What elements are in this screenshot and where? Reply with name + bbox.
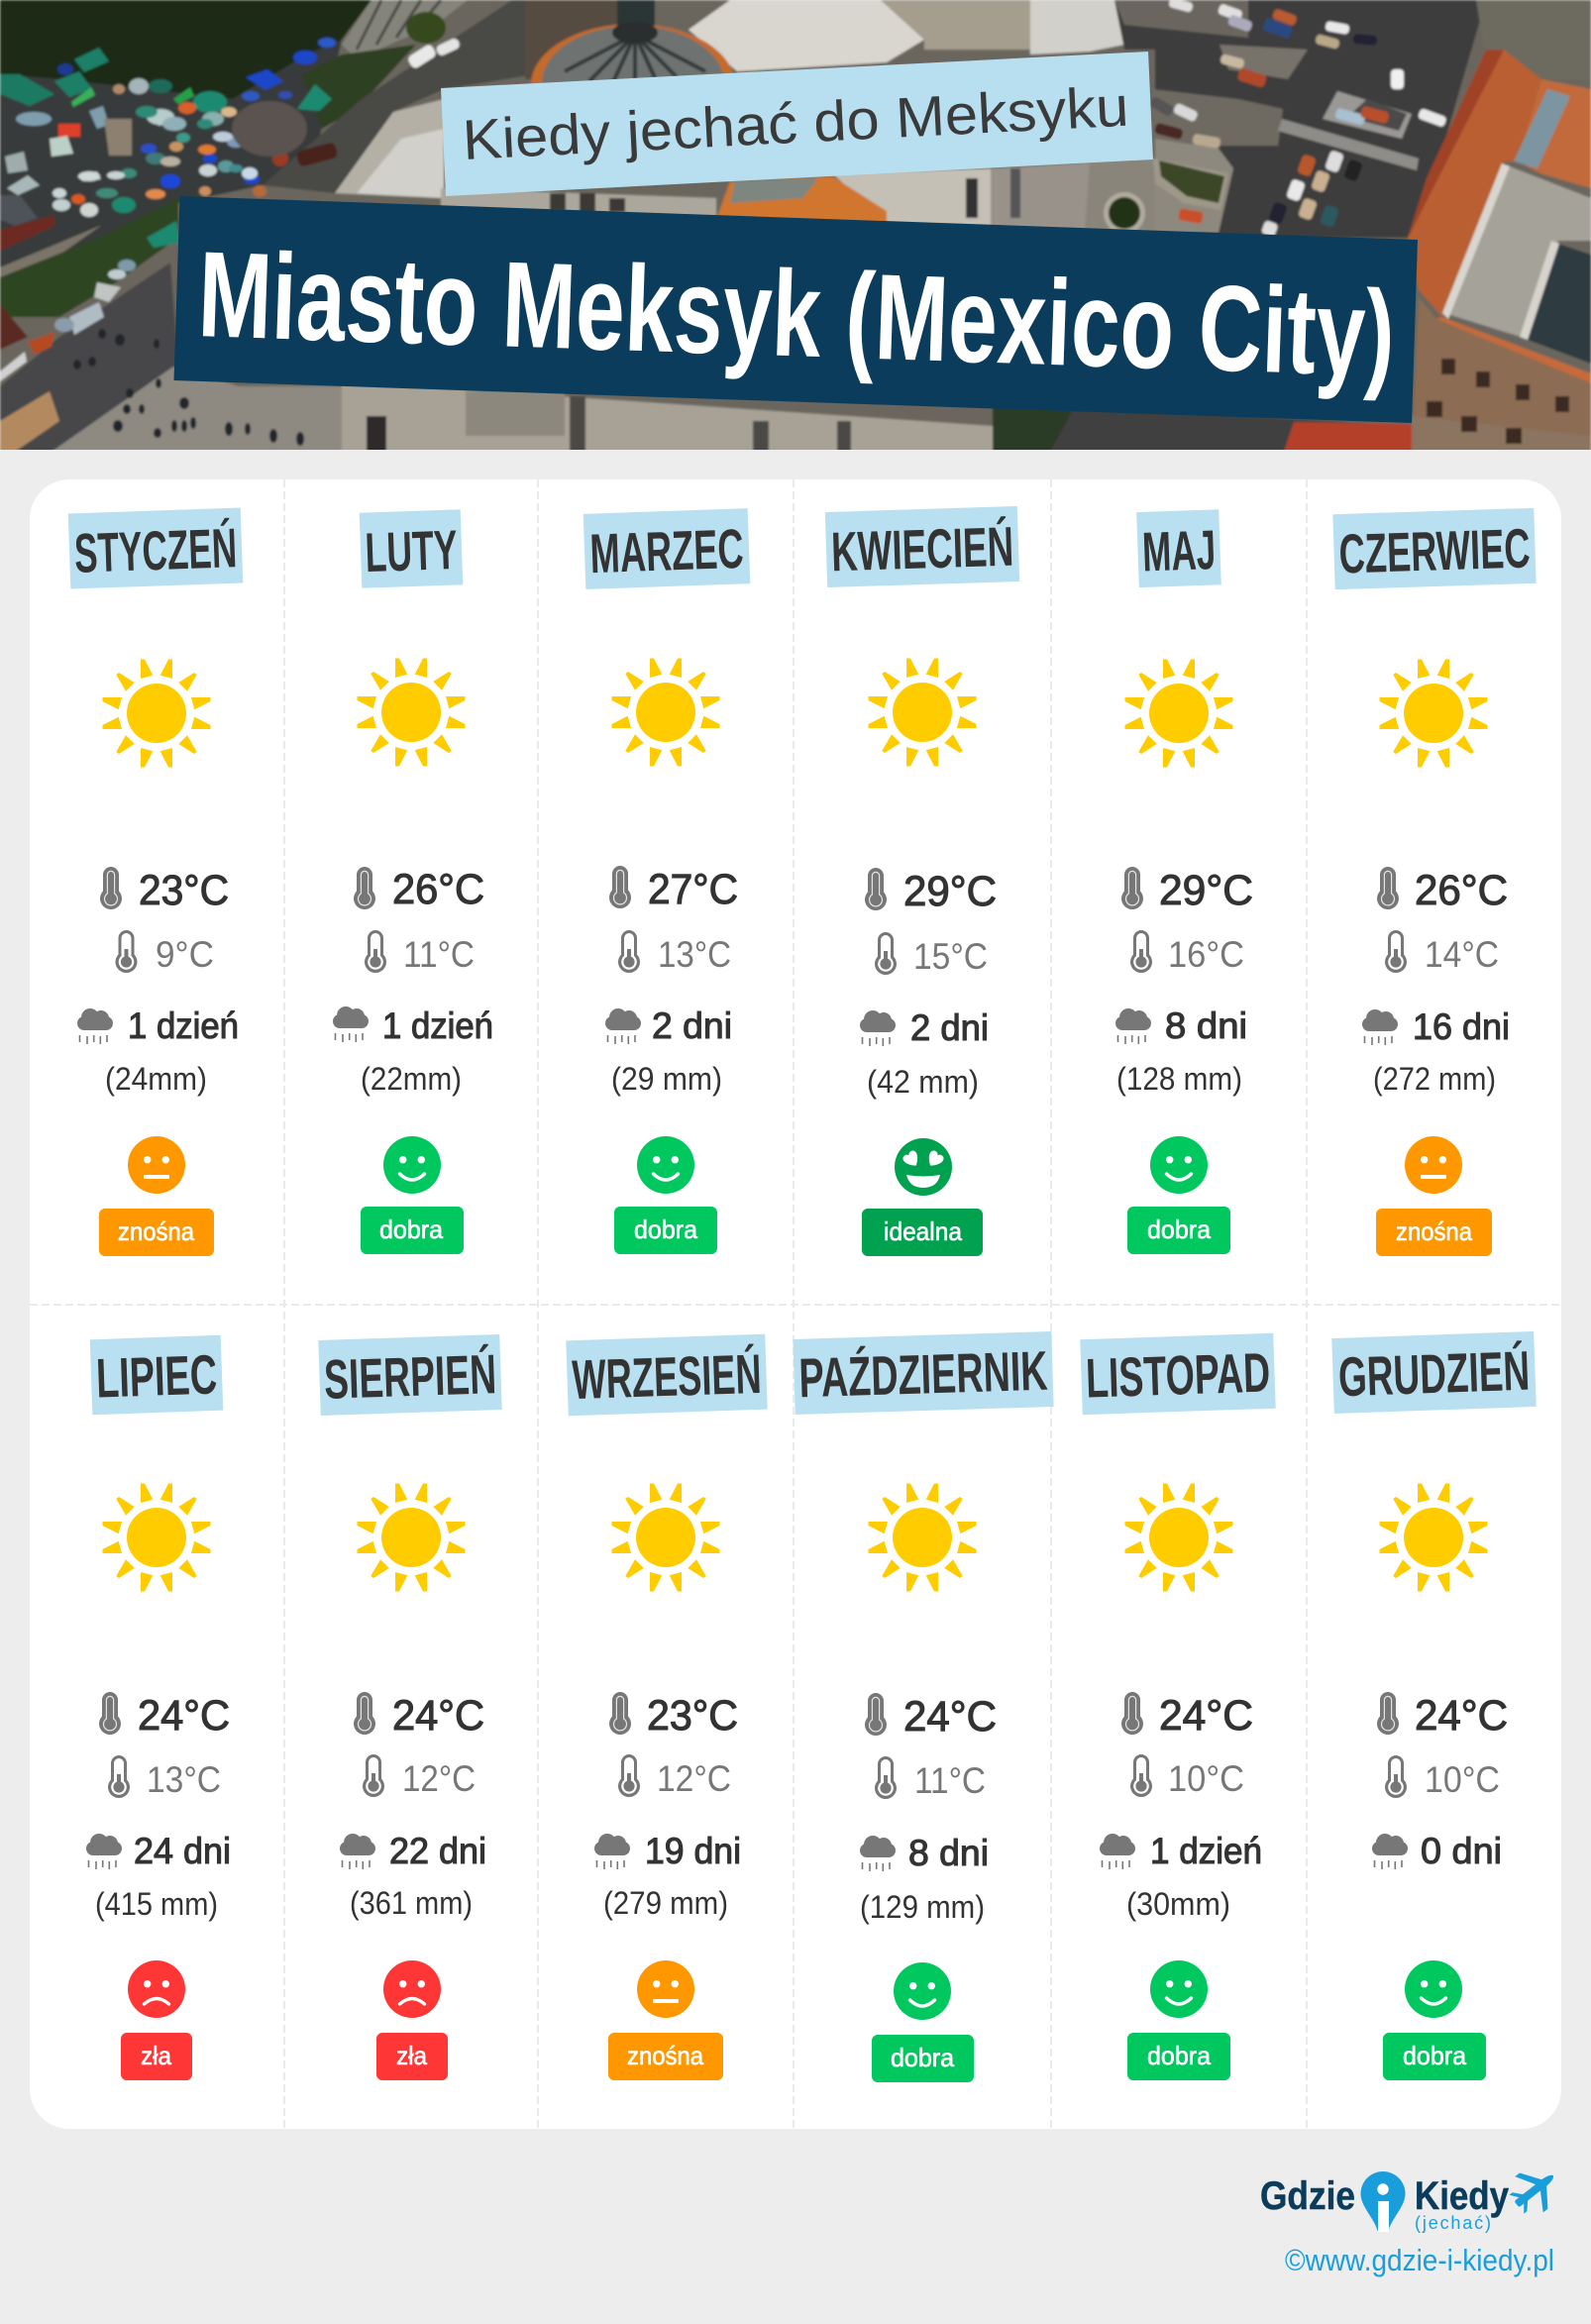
min temperature: 13°C <box>658 934 731 975</box>
icon: airplane <box>1503 2158 1567 2222</box>
heading: grudzień <box>1331 1331 1537 1414</box>
heading: sierpień: SIERPIEŃ <box>323 1342 497 1411</box>
rainfall: (22mm) <box>361 1061 462 1097</box>
logo: Gdzie i Kiedy: Kiedy <box>1415 2174 1510 2218</box>
min temperature: 11°C <box>403 934 475 975</box>
heading: styczeń: STYCZEŃ <box>73 516 238 584</box>
icon: sun <box>1379 1484 1488 1591</box>
rainfall: (415 mm) <box>95 1886 218 1922</box>
rating badge <box>361 1207 464 1254</box>
rating badge <box>614 1207 717 1254</box>
rating badge <box>1383 2033 1486 2080</box>
market tents <box>0 37 461 452</box>
heading: październik <box>793 1331 1054 1415</box>
min temperature: 16°C <box>1168 934 1244 975</box>
heading: maj <box>1136 509 1221 587</box>
icon: neutral face <box>637 1960 694 2018</box>
min temperature <box>1130 1754 1244 1799</box>
rainfall: (272 mm) <box>1373 1061 1496 1097</box>
max temperature <box>865 1693 997 1741</box>
max temperature <box>99 1692 230 1740</box>
max temperature: 27°C <box>648 866 738 913</box>
min temperature: 10°C <box>1425 1759 1500 1800</box>
max temperature: 24°C <box>1159 1692 1253 1740</box>
icon: happy face <box>894 1962 951 2020</box>
panel: calendar card <box>30 479 1561 2129</box>
max temperature: 26°C <box>1415 867 1508 914</box>
month: sierpień <box>318 1334 502 2080</box>
rainy days: 1 dzień <box>1150 1831 1262 1871</box>
icon: sun <box>357 1484 466 1591</box>
min temperature <box>115 930 214 975</box>
min temperature: 9°C <box>156 934 214 975</box>
rainfall: (42 mm) <box>867 1064 979 1100</box>
cars <box>1149 0 1447 238</box>
icon: sad face <box>383 1960 441 2018</box>
rating badge: dobra <box>1147 1215 1212 1244</box>
rainy days <box>333 1005 493 1046</box>
max temperature: 29°C <box>1159 867 1253 914</box>
icon: sad face <box>128 1960 185 2018</box>
min temperature <box>618 930 731 975</box>
icon: love-eyes face <box>895 1138 952 1196</box>
month: marzec <box>583 508 750 1254</box>
icon: sun <box>1125 660 1232 767</box>
rainy days: 8 dni <box>1165 1005 1247 1046</box>
logo: Gdzie i Kiedy: (jechać) <box>1415 2213 1491 2233</box>
max temperature: 24°C <box>392 1692 484 1740</box>
max temperature: 24°C <box>138 1692 230 1740</box>
heading: marzec: MARZEC <box>589 517 745 584</box>
heading: październik: PAŹDZIERNIK <box>798 1339 1048 1409</box>
heading: maj: MAJ <box>1141 518 1217 582</box>
rainy days <box>594 1831 741 1871</box>
rainfall: (129 mm) <box>860 1889 985 1925</box>
min temperature <box>875 1756 986 1801</box>
max temperature <box>609 1692 738 1740</box>
icon: sun <box>357 658 466 767</box>
min temperature <box>108 1755 221 1800</box>
rainfall: (128 mm) <box>1116 1061 1242 1097</box>
heading: marzec <box>583 508 750 589</box>
icon: sun <box>103 660 210 767</box>
rainy days: 2 dni <box>910 1007 989 1048</box>
month: październik <box>793 1331 1054 2082</box>
rating badge <box>121 2033 192 2080</box>
min temperature <box>875 932 988 977</box>
rating badge <box>376 2033 448 2080</box>
rainy days <box>1362 1006 1510 1047</box>
icon: happy face <box>637 1136 694 1194</box>
month: lipiec <box>86 1335 231 2080</box>
icon: happy face <box>383 1136 441 1194</box>
max temperature: 29°C <box>903 868 997 915</box>
min temperature: 11°C <box>914 1760 986 1801</box>
rainy days: 24 dni <box>134 1831 231 1871</box>
heading: listopad <box>1080 1333 1276 1415</box>
rainy days: 1 dzień <box>382 1005 493 1046</box>
rainy days <box>340 1831 486 1871</box>
rating badge <box>862 1209 983 1256</box>
subtitle banner: Kiedy jechać do Meksyku <box>461 75 1130 172</box>
rainy days <box>86 1831 231 1871</box>
min temperature <box>618 1754 731 1799</box>
rating badge <box>608 2033 723 2080</box>
min temperature <box>1130 930 1244 975</box>
icon: happy face <box>1405 1960 1462 2018</box>
min temperature <box>363 1754 476 1799</box>
heading: kwiecień <box>825 506 1019 587</box>
rainy days: 0 dni <box>1421 1831 1502 1871</box>
month: maj <box>1115 509 1253 1254</box>
month: czerwiec <box>1332 508 1537 1256</box>
logo: Gdzie i Kiedy <box>1260 2158 1567 2233</box>
icon: neutral face <box>128 1136 185 1194</box>
min temperature: 13°C <box>147 1759 221 1800</box>
rating badge <box>872 2035 974 2082</box>
rainy days <box>77 1005 239 1046</box>
rating badge <box>1127 1207 1230 1254</box>
icon: sun <box>103 1484 210 1591</box>
max temperature <box>100 867 229 914</box>
heading: czerwiec <box>1332 508 1537 589</box>
header photo: aerial view of Mexico City <box>0 0 1591 452</box>
heading: listopad: LISTOPAD <box>1085 1340 1271 1410</box>
rating badge <box>99 1209 214 1256</box>
max temperature: 23°C <box>647 1692 738 1740</box>
max temperature: 26°C <box>392 866 484 913</box>
rainy days <box>1100 1831 1262 1871</box>
icon: sun <box>1379 660 1488 767</box>
min temperature <box>365 930 475 975</box>
rainfall: (24mm) <box>105 1061 207 1097</box>
min temperature: 12°C <box>402 1758 476 1799</box>
rainy days: 16 dni <box>1413 1006 1510 1047</box>
rating badge: zła <box>141 2041 171 2070</box>
icon: happy face <box>1150 1960 1208 2018</box>
month: wrzesień <box>566 1334 768 2080</box>
month: kwiecień <box>825 506 1019 1256</box>
min temperature: 12°C <box>657 1758 731 1799</box>
logo: Gdzie i Kiedy: Gdzie <box>1260 2174 1355 2218</box>
icon: sun <box>868 1484 977 1591</box>
icon: happy face <box>1150 1136 1208 1194</box>
min temperature <box>1385 930 1499 975</box>
heading: luty: LUTY <box>364 518 459 583</box>
rating badge: znośna <box>627 2041 703 2070</box>
icon: sun <box>612 658 719 767</box>
heading: lipiec: LIPIEC <box>95 1342 218 1410</box>
heading: wrzesień <box>566 1334 768 1416</box>
max temperature: 24°C <box>1415 1692 1508 1740</box>
rainy days <box>605 1005 732 1046</box>
month: grudzień <box>1331 1331 1537 2080</box>
rating badge: dobra <box>634 1215 698 1244</box>
rainy days <box>860 1833 989 1873</box>
max temperature <box>354 866 484 913</box>
max temperature <box>865 868 997 915</box>
heading: luty <box>360 509 463 588</box>
month: luty <box>333 509 493 1254</box>
rating badge: znośna <box>1396 1216 1472 1246</box>
rainy days: 22 dni <box>389 1831 486 1871</box>
rating badge <box>1127 2033 1230 2080</box>
rainy days: 8 dni <box>908 1833 989 1873</box>
rainy days <box>1115 1005 1247 1046</box>
rating badge <box>1376 1209 1492 1256</box>
heading: sierpień <box>318 1334 502 1416</box>
rainy days <box>860 1007 989 1048</box>
icon: sun <box>612 1484 719 1591</box>
heading: kwiecień: KWIECIEŃ <box>830 515 1014 582</box>
rainy days: 1 dzień <box>128 1005 239 1046</box>
rainfall: (30mm) <box>1126 1886 1230 1922</box>
heading: lipiec <box>90 1335 223 1415</box>
min temperature: 10°C <box>1168 1758 1244 1799</box>
rating badge: zła <box>396 2041 427 2070</box>
subtitle banner <box>441 52 1153 196</box>
rainy days: 19 dni <box>645 1831 741 1871</box>
icon: sun <box>1125 1484 1232 1591</box>
rating badge: dobra <box>379 1215 444 1244</box>
heading: styczeń <box>68 507 243 589</box>
rating badge: idealna <box>884 1216 963 1246</box>
rating badge: dobra <box>1403 2041 1467 2070</box>
max temperature: 23°C <box>139 867 229 914</box>
icon: sun <box>868 658 977 767</box>
rating badge: dobra <box>1147 2041 1212 2070</box>
rating badge: dobra <box>891 2043 955 2072</box>
icon: map pin <box>1361 2171 1405 2232</box>
max temperature <box>354 1692 484 1740</box>
max temperature <box>609 866 738 913</box>
rainfall: (361 mm) <box>350 1885 473 1921</box>
website credit: ©www.gdzie-i-kiedy.pl <box>1285 2243 1554 2277</box>
rainy days <box>1372 1831 1502 1871</box>
max temperature: 24°C <box>903 1693 997 1741</box>
month: listopad <box>1080 1333 1276 2080</box>
month: styczeń <box>68 507 243 1256</box>
icon: neutral face <box>1405 1136 1462 1194</box>
rainfall: (279 mm) <box>603 1885 728 1921</box>
min temperature <box>1385 1755 1500 1800</box>
min temperature: 15°C <box>913 936 988 977</box>
min temperature: 14°C <box>1425 934 1499 975</box>
rating badge: znośna <box>118 1216 194 1246</box>
rainfall: (29 mm) <box>611 1061 722 1097</box>
heading: wrzesień: WRZESIEŃ <box>572 1342 763 1411</box>
rainy days: 2 dni <box>652 1005 732 1046</box>
